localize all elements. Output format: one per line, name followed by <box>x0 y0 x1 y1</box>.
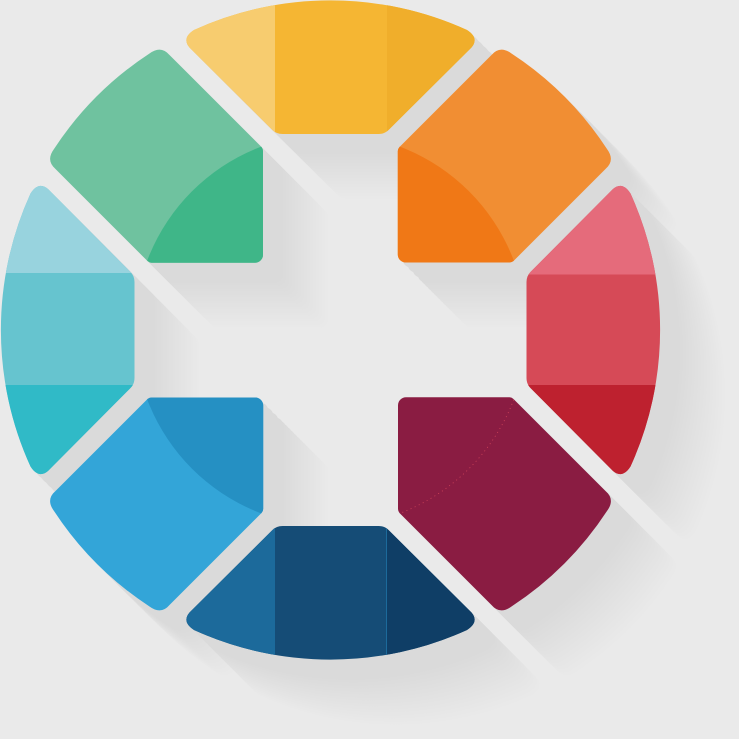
segment: bottom navy <box>186 526 475 660</box>
segment: left teal <box>0 186 134 474</box>
segment: top-right orange <box>398 50 611 262</box>
segment: bottom-right maroon <box>398 397 611 610</box>
segment: top-left green <box>50 50 263 263</box>
segment: top yellow <box>186 0 475 134</box>
segment: right red <box>526 186 660 474</box>
segment: bottom-left blue <box>50 398 264 610</box>
